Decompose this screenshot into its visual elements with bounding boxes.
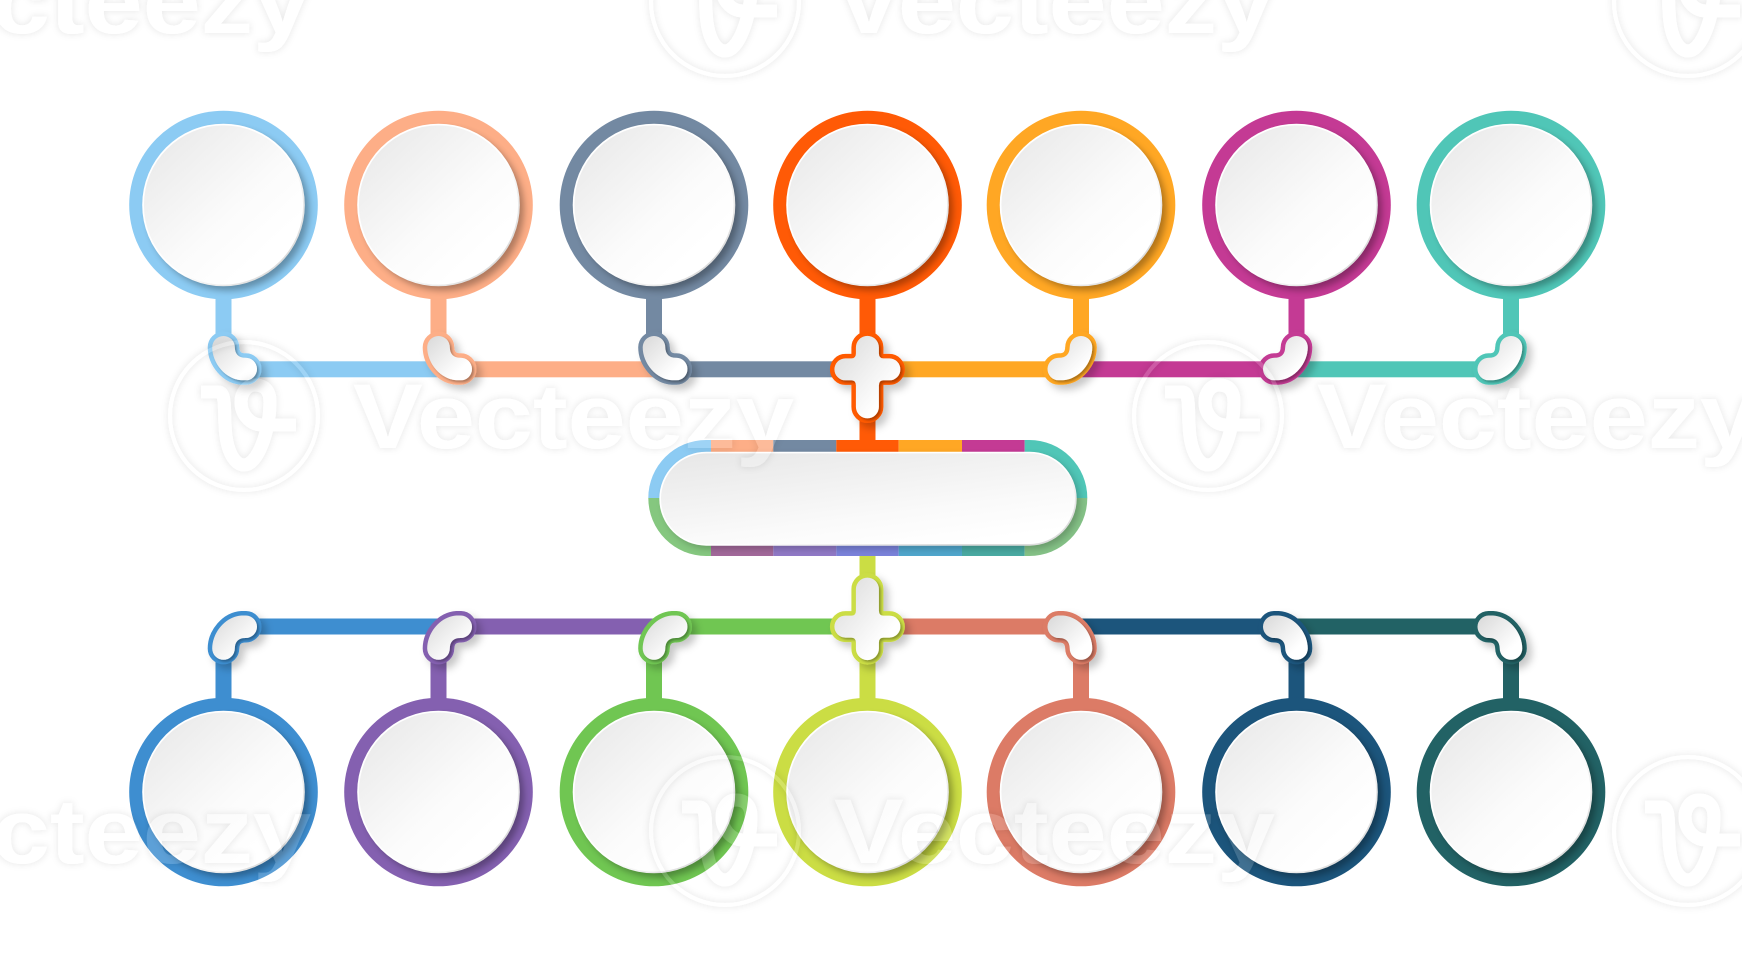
- joint 7: [1478, 336, 1522, 380]
- circle node 8: [129, 698, 318, 886]
- joint 14: [1478, 616, 1522, 660]
- circle node 12: [987, 698, 1175, 886]
- circle node 3: [560, 111, 748, 299]
- circle node 7: [1417, 111, 1605, 299]
- joint 5: [1048, 336, 1092, 380]
- watermark: Vecteezy: [1317, 366, 1742, 468]
- circle node 9: [344, 698, 533, 886]
- circle node 14: [1417, 698, 1605, 886]
- connector bars: top row: [224, 361, 1511, 377]
- circle node 6: [1202, 111, 1391, 299]
- cross joint bottom: [834, 578, 900, 660]
- joint 3: [643, 336, 687, 380]
- watermark: Vecteezy: [353, 366, 794, 468]
- watermark: Vecteezy: [834, 781, 1275, 883]
- circle node 10: [560, 698, 748, 886]
- circle node 13: [1202, 698, 1391, 886]
- circle node 1: [129, 111, 318, 299]
- stems: bottom row: [216, 555, 1519, 705]
- joint 2: [427, 336, 472, 380]
- circle node 4: [773, 111, 962, 299]
- connector bars: bottom row: [224, 618, 1511, 634]
- joint 1: [212, 336, 257, 380]
- cross joint top: [834, 336, 900, 418]
- joint 13: [1263, 616, 1308, 660]
- circle node 2: [344, 111, 533, 299]
- joint 10: [643, 616, 687, 660]
- stems: top row: [216, 290, 1519, 441]
- joint 6: [1263, 336, 1308, 380]
- circle node 5: [987, 111, 1175, 299]
- joint 8: [212, 616, 257, 660]
- joint 12: [1048, 616, 1092, 660]
- circle node 11: [773, 698, 962, 886]
- central pill node: [648, 440, 1088, 556]
- joint 9: [427, 616, 472, 660]
